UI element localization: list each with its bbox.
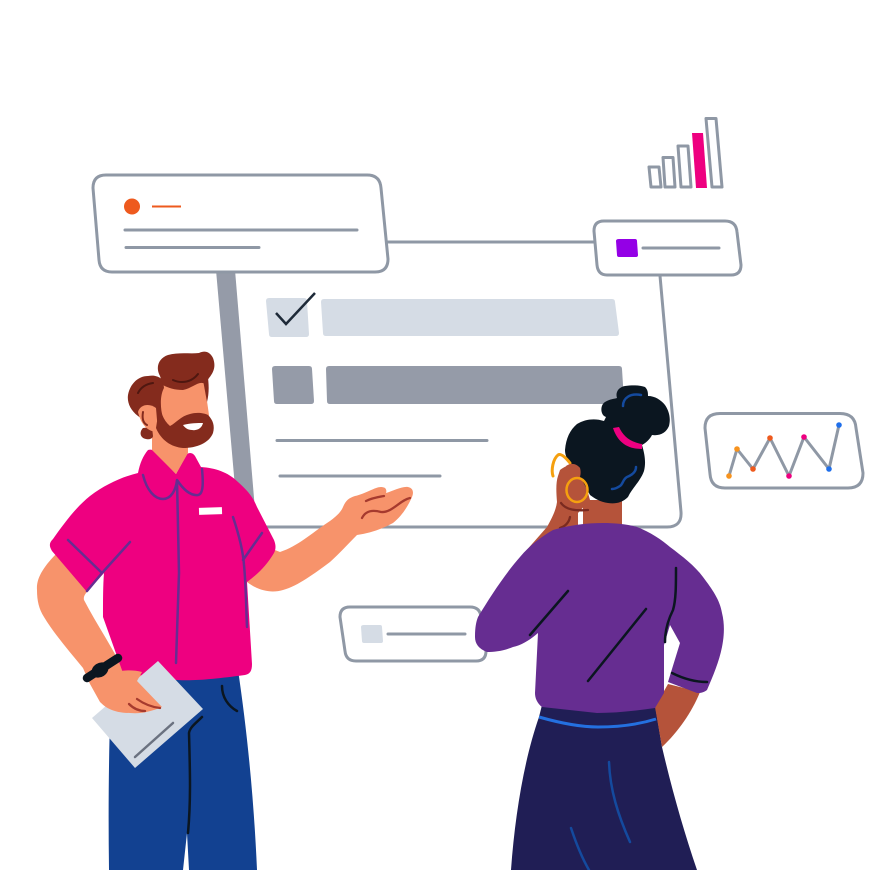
- finger lines: [129, 699, 160, 711]
- sweater: [475, 523, 724, 713]
- hand over paper: [94, 670, 162, 713]
- hair: [565, 385, 670, 503]
- icon: wristwatch: [87, 658, 118, 681]
- raised arm: [525, 464, 590, 552]
- card outline: [93, 175, 388, 272]
- card outline: [705, 414, 863, 488]
- ear: [566, 464, 581, 486]
- sweater folds: [530, 568, 707, 682]
- hair highlight lines: [138, 374, 198, 393]
- second row bar: [326, 366, 624, 404]
- card: line chart: [705, 414, 863, 488]
- checked row box: [266, 298, 309, 337]
- smile: [183, 423, 203, 430]
- left arm: [37, 552, 165, 713]
- paper line: [135, 723, 173, 757]
- icon: check mark: [276, 293, 315, 324]
- card: bottom: [340, 607, 486, 661]
- shirt: [50, 450, 276, 680]
- neck: [583, 500, 622, 526]
- card lines: [125, 230, 357, 248]
- card: top left: [93, 175, 388, 272]
- belt line: [539, 717, 656, 727]
- chart line: [729, 425, 839, 476]
- text lines: [277, 440, 487, 476]
- sideburn: [203, 378, 209, 402]
- outlined bars: [649, 118, 722, 187]
- clipboard paper: [92, 661, 203, 768]
- skirt: [511, 705, 697, 870]
- neck: [152, 425, 188, 474]
- second row box: [272, 366, 314, 404]
- icon: left earring: [552, 455, 570, 476]
- trousers: [109, 670, 257, 870]
- pink hair band: [613, 427, 642, 449]
- card line: [388, 632, 465, 636]
- card: top right: [594, 221, 741, 275]
- chart points: [726, 422, 842, 479]
- right arm and open hand: [247, 487, 413, 591]
- trouser lines: [188, 686, 237, 833]
- hand on hip: [655, 684, 700, 747]
- checked row bar: [321, 299, 619, 336]
- ear: [138, 405, 158, 432]
- panel: checklist board: [216, 242, 681, 527]
- ear line: [143, 412, 147, 425]
- board outline: [230, 242, 681, 527]
- name badge: [199, 507, 222, 515]
- purple square: [616, 239, 638, 257]
- figure: woman: [475, 385, 724, 870]
- orange dash: [152, 206, 181, 208]
- highlighted bar: [692, 133, 707, 188]
- orange dot: [124, 198, 140, 214]
- hair back tuft: [141, 427, 153, 439]
- board thick left edge: [216, 270, 255, 510]
- side hair: [128, 376, 164, 425]
- hair highlights: [612, 395, 641, 489]
- card outline: [594, 221, 741, 275]
- grey square: [361, 625, 383, 643]
- card outline: [340, 607, 486, 661]
- hand lines: [362, 496, 410, 518]
- bar chart: [649, 118, 722, 188]
- beard: [156, 402, 214, 448]
- shirt seams: [68, 469, 262, 663]
- face: [152, 380, 209, 440]
- figure: man: [37, 352, 413, 870]
- icon: hoop earring: [566, 478, 588, 502]
- skirt folds: [571, 762, 630, 870]
- top hair: [158, 352, 214, 390]
- finger lines: [560, 503, 588, 528]
- card line: [643, 246, 719, 250]
